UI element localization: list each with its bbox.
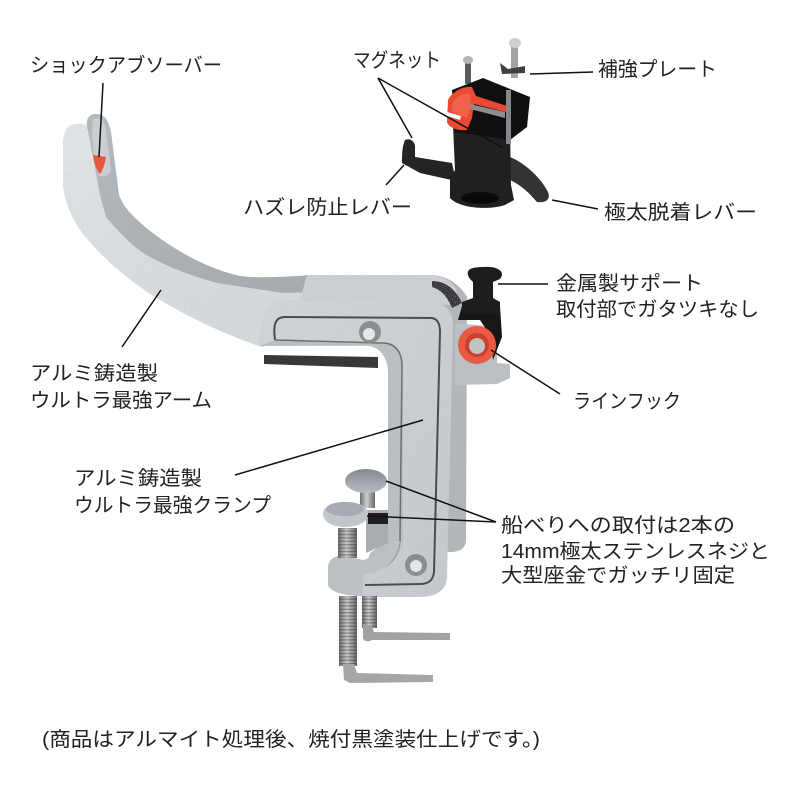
leader lines: [99, 72, 598, 522]
front screw: [323, 502, 433, 683]
label: metal support: [556, 272, 759, 321]
label: aluminium clamp: ウルトラ最強クランプ: [74, 494, 271, 517]
line hook: [458, 326, 496, 364]
label: mounting screws: 船べりへの取付は2本の: [501, 514, 735, 537]
label: aluminium arm: アルミ鋳造製: [30, 362, 158, 385]
footnote: (商品はアルマイト処理後、焼付黒塗装仕上げです。): [42, 728, 540, 751]
label: aluminium clamp: [74, 467, 271, 517]
label: mounting screws: [501, 514, 770, 587]
line hook mount: [455, 267, 510, 385]
label: metal support: 取付部でガタツキなし: [556, 298, 759, 321]
reinforcing plate screws: [465, 62, 471, 84]
label: release lever: 極太脱着レバー: [604, 201, 757, 224]
product photo: aluminium holder: [63, 114, 510, 683]
label: line hook: ラインフック: [573, 390, 681, 413]
metal support knob: [462, 267, 502, 313]
label: aluminium arm: [30, 362, 212, 412]
label: mounting screws: 大型座金でガッチリ固定: [501, 564, 735, 587]
label: mounting screws: 14mm極太ステンレスネジと: [501, 540, 770, 563]
red magnet holder: [447, 87, 507, 130]
label: magnet: マグネット: [353, 49, 441, 72]
label: reinforcing plate: 補強プレート: [598, 58, 717, 81]
label: aluminium clamp: アルミ鋳造製: [74, 467, 202, 490]
clamp frame: [259, 300, 453, 597]
big release lever: [505, 157, 549, 202]
rubber pad: [264, 355, 378, 368]
back screw: [345, 469, 450, 641]
label: anti-slip lever: ハズレ防止レバー: [243, 196, 412, 219]
hex bolts: [359, 321, 381, 343]
icon: shock absorber red tip: [93, 155, 106, 174]
back plate and top housing: [300, 275, 467, 552]
arm: [63, 114, 330, 347]
label: metal support: 金属製サポート: [556, 272, 703, 295]
label: aluminium arm: ウルトラ最強アーム: [30, 389, 212, 412]
product photo: black lever head: [402, 38, 549, 208]
lower jaw: [328, 510, 400, 596]
body: [450, 125, 514, 208]
anti-slip lever: [402, 139, 456, 181]
label: shock absorber: ショックアブソーバー: [30, 53, 222, 77]
